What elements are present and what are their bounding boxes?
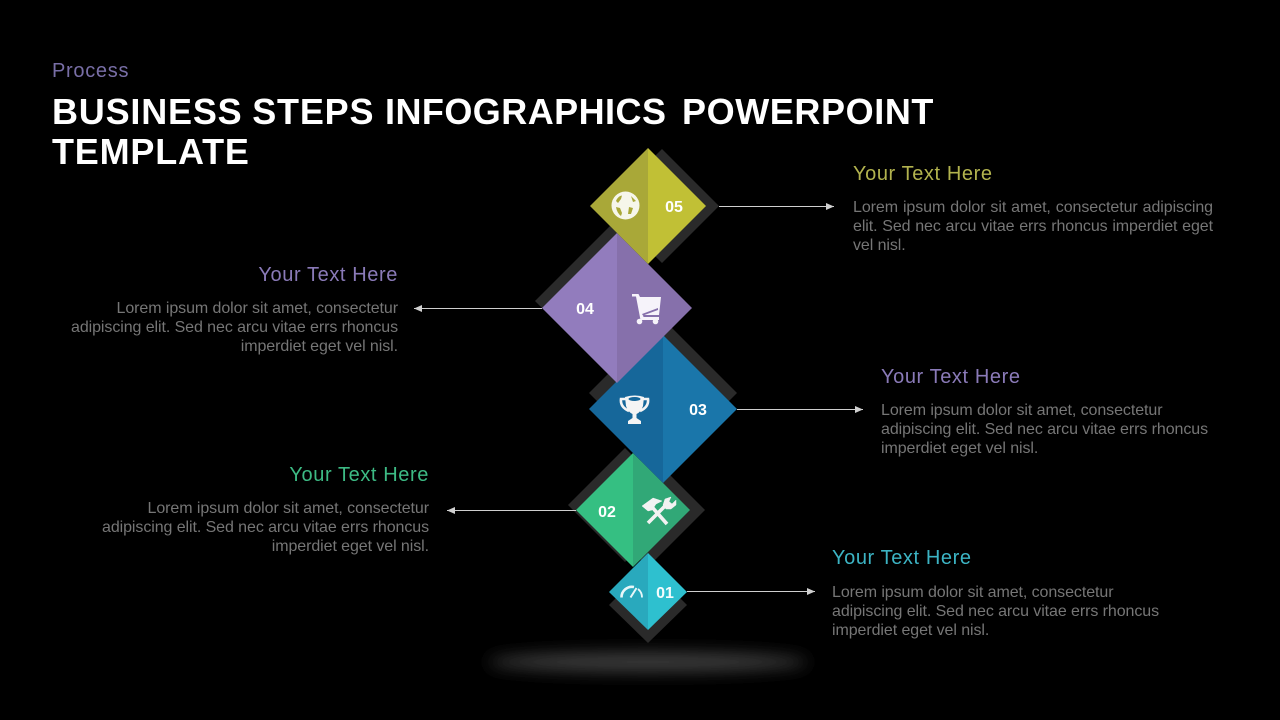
- callout 05: Lorem ipsum dolor sit amet, consectetur adipiscing: [853, 199, 1213, 216]
- step 03 diamond: 03: [689, 402, 707, 419]
- callout 01: Your Text Here: [832, 547, 972, 569]
- callout 02: [102, 464, 429, 555]
- step 02 diamond: [576, 453, 690, 567]
- title: TEMPLATE: [52, 131, 250, 172]
- callout 03: imperdiet eget vel nisl.: [881, 440, 1038, 457]
- connector lines: [414, 206, 863, 592]
- back shadows: [535, 149, 737, 643]
- icon: shopping cart: [632, 294, 661, 324]
- callout 04: [71, 264, 398, 355]
- callout 05: vel nisl.: [853, 237, 906, 254]
- callout 03: adipiscing elit. Sed nec arcu vitae errs rhoncus: [881, 421, 1208, 438]
- icon: hammer and wrench: [642, 497, 676, 524]
- icon: globe: [612, 192, 640, 220]
- callout 05: elit. Sed nec arcu vitae errs rhoncus imperdiet eget: [853, 218, 1213, 235]
- callout 04: Your Text Here: [258, 264, 398, 286]
- title: [52, 91, 934, 172]
- callout 01: Lorem ipsum dolor sit amet, consectetur: [832, 584, 1113, 601]
- callout 05: Your Text Here: [853, 163, 993, 185]
- callout 05: [853, 163, 1213, 254]
- icon: gauge: [621, 587, 642, 598]
- callout 03: Lorem ipsum dolor sit amet, consectetur: [881, 402, 1162, 419]
- step 04 diamond: [542, 233, 692, 383]
- callout 02: adipiscing elit. Sed nec arcu vitae errs rhoncus: [102, 519, 429, 536]
- step 01 diamond: [609, 553, 687, 630]
- callout 04: Lorem ipsum dolor sit amet, consectetur: [117, 300, 398, 317]
- callout 02: Lorem ipsum dolor sit amet, consectetur: [148, 500, 429, 517]
- callout 02: imperdiet eget vel nisl.: [272, 538, 429, 555]
- step 04 diamond: 04: [576, 301, 594, 318]
- title: BUSINESS STEPS: [52, 91, 374, 132]
- category label: Process: [52, 60, 129, 82]
- callout 04: adipiscing elit. Sed nec arcu vitae errs rhoncus: [71, 319, 398, 336]
- step 05 diamond: 05: [665, 199, 683, 216]
- step 05 diamond: [590, 148, 706, 264]
- step 03 diamond: [589, 335, 737, 483]
- ground shadow: [488, 652, 808, 672]
- step 02 diamond: 02: [598, 504, 616, 521]
- callout 03: [881, 366, 1208, 457]
- callout 03: Your Text Here: [881, 366, 1021, 388]
- title: POWERPOINT: [682, 91, 934, 132]
- step 01 diamond: 01: [656, 585, 674, 602]
- callout 02: Your Text Here: [289, 464, 429, 486]
- callout 01: imperdiet eget vel nisl.: [832, 622, 989, 639]
- callout 01: adipiscing elit. Sed nec arcu vitae errs rhoncus: [832, 603, 1159, 620]
- icon: trophy: [621, 396, 648, 424]
- callout 01: [832, 547, 1159, 639]
- title: INFOGRAPHICS: [385, 91, 666, 132]
- callout 04: imperdiet eget vel nisl.: [241, 338, 398, 355]
